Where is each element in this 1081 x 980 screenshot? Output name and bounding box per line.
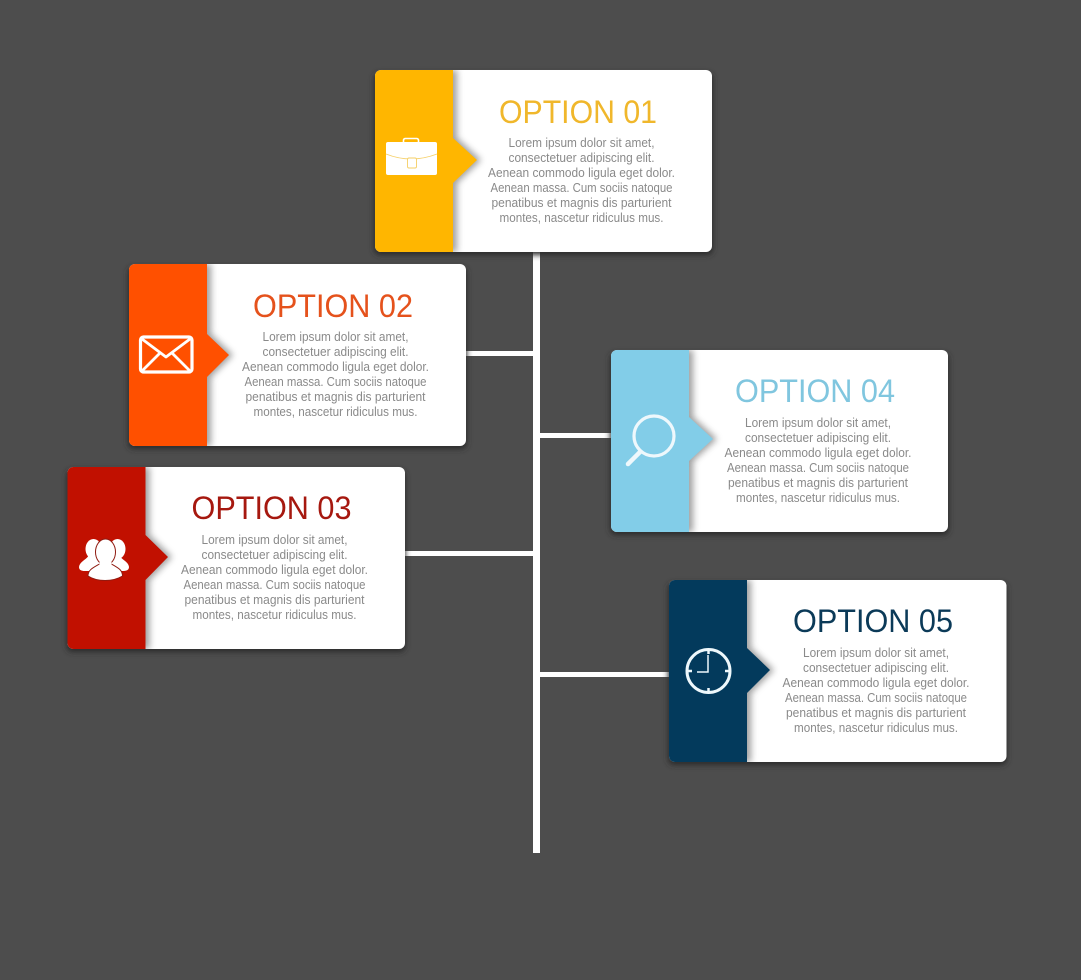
text block: option 04: Aenean massa. Cum sociis natoque: [727, 461, 909, 475]
text block: option 03: [181, 533, 368, 622]
heading: option 02: OPTION 02: [253, 288, 413, 324]
text block: option 01: consectetuer adipiscing elit.: [508, 151, 654, 165]
icon: people: [79, 539, 129, 580]
panel: option 04: [610, 350, 949, 535]
text block: option 05: montes, nascetur ridiculus mus.: [794, 721, 958, 735]
heading: option 04: OPTION 04: [735, 373, 895, 409]
text block: option 03: Aenean massa. Cum sociis natoque: [184, 578, 366, 592]
icon: envelope: [140, 337, 192, 372]
text block: option 01: montes, nascetur ridiculus mus.: [500, 211, 664, 225]
text block: option 03: montes, nascetur ridiculus mus.: [192, 608, 356, 622]
text block: option 04: [724, 416, 912, 505]
text block: option 05: Lorem ipsum dolor sit amet,: [803, 646, 949, 660]
panel: option 02: [128, 264, 467, 449]
text block: option 04: montes, nascetur ridiculus mus.: [736, 491, 900, 505]
text block: option 02: consectetuer adipiscing elit.: [262, 345, 408, 359]
panel: option 01: [374, 70, 713, 255]
icon: magnifying glass: [628, 416, 674, 464]
heading: option 01: OPTION 01: [499, 94, 657, 130]
text block: option 02: Lorem ipsum dolor sit amet,: [262, 330, 408, 344]
panel: option 05: [668, 580, 1007, 765]
text block: option 01: Aenean commodo ligula eget dolor.: [488, 166, 675, 180]
text block: option 02: Aenean massa. Cum sociis natoque: [244, 375, 427, 389]
text block: option 04: penatibus et magnis dis parturient: [728, 476, 908, 490]
text block: option 03: Lorem ipsum dolor sit amet,: [202, 533, 348, 547]
text block: option 04: consectetuer adipiscing elit.: [745, 431, 891, 445]
text block: option 01: [488, 136, 675, 225]
heading: option 03: OPTION 03: [192, 490, 352, 526]
text block: option 01: penatibus et magnis dis parturient: [492, 196, 672, 210]
text block: option 04: Lorem ipsum dolor sit amet,: [745, 416, 891, 430]
text block: option 05: consectetuer adipiscing elit.: [803, 661, 949, 675]
text block: option 03: penatibus et magnis dis parturient: [184, 593, 365, 607]
text block: option 02: penatibus et magnis dis parturient: [246, 390, 426, 404]
timeline: vertical trunk and branches: [403, 250, 671, 853]
text block: option 03: consectetuer adipiscing elit.: [202, 548, 348, 562]
heading: option 05: OPTION 05: [793, 603, 953, 639]
text block: option 02: montes, nascetur ridiculus mus.: [254, 405, 418, 419]
panel: option 03: [66, 467, 406, 652]
text block: option 01: Lorem ipsum dolor sit amet,: [508, 136, 654, 150]
text block: option 02: [242, 330, 429, 419]
icon: briefcase: [386, 138, 437, 175]
text block: option 01: Aenean massa. Cum sociis natoque: [490, 181, 673, 195]
text block: option 03: Aenean commodo ligula eget dolor.: [181, 563, 368, 577]
text block: option 05: penatibus et magnis dis parturient: [786, 706, 966, 720]
text block: option 05: Aenean commodo ligula eget dolor.: [782, 676, 970, 690]
text block: option 02: Aenean commodo ligula eget dolor.: [242, 360, 429, 374]
icon: clock: [687, 649, 730, 693]
text block: option 04: Aenean commodo ligula eget dolor.: [724, 446, 912, 460]
text block: option 05: Aenean massa. Cum sociis natoque: [785, 691, 967, 705]
text block: option 05: [782, 646, 970, 735]
